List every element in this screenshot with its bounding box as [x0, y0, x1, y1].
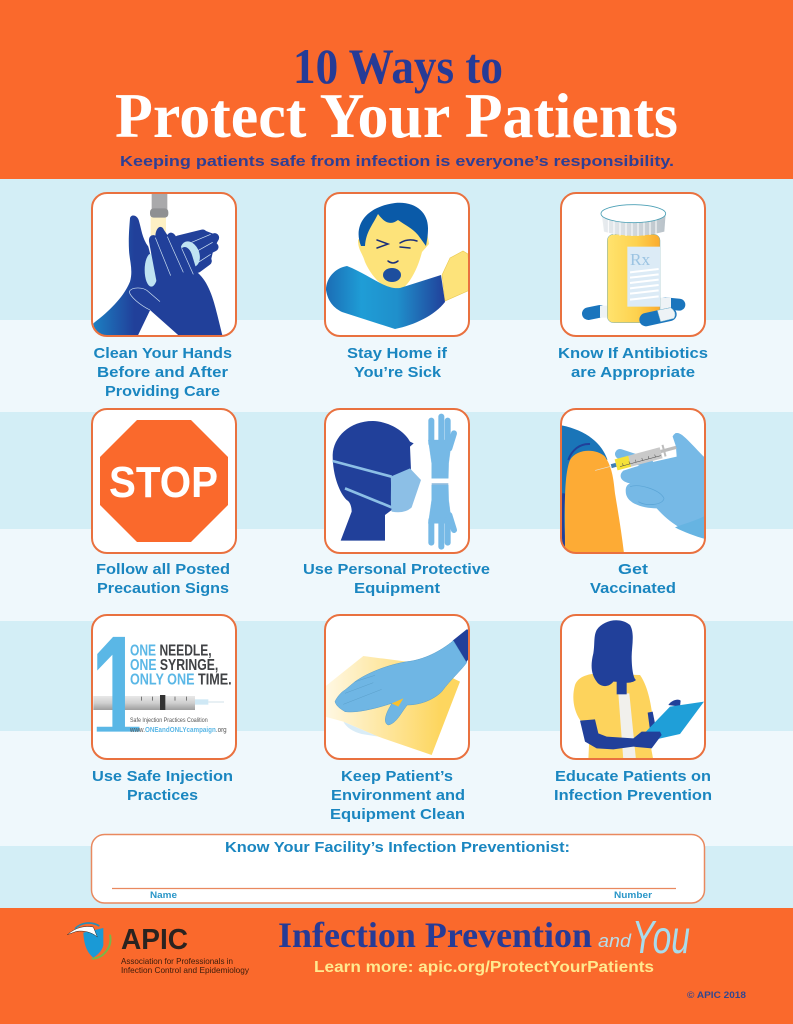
caption: clean hands — [94, 345, 232, 400]
card: vaccination — [560, 409, 707, 553]
caption: clean hands: Providing Care — [105, 383, 220, 400]
title line 1: 10 Ways to — [293, 38, 503, 94]
caption: safe injection — [92, 768, 233, 804]
card: clean hands — [92, 192, 236, 337]
panel: know your infection preventionist: Name — [150, 890, 177, 901]
icon: pill bottle: Rx — [630, 250, 651, 269]
icon: woman with clipboard — [573, 620, 704, 760]
caption: clean environment — [330, 768, 465, 823]
footer banner — [0, 908, 793, 1024]
tagline — [278, 911, 690, 963]
caption: clean environment: Keep Patient’s — [341, 768, 453, 785]
icon: person sneezing into elbow — [326, 203, 470, 329]
card: antibiotics — [561, 193, 705, 336]
copyright: © APIC 2018 — [687, 990, 746, 1001]
panel: know your infection preventionist: Know Your Facility’s Infection Preventionist: — [225, 839, 570, 856]
header banner — [0, 0, 793, 179]
caption: protective equipment: Equipment — [354, 580, 440, 597]
caption: vaccinated: Get — [618, 561, 648, 578]
APIC logo — [67, 923, 250, 975]
campaign logo with syringe: ONE SYRINGE, — [130, 657, 218, 674]
card: one needle campaign — [91, 614, 237, 760]
card: protective equipment — [325, 409, 469, 553]
icon: washing hands — [93, 192, 223, 337]
card: clean environment — [325, 615, 470, 759]
caption: antibiotics: Know If Antibiotics — [558, 345, 708, 362]
caption: clean hands: Before and After — [97, 364, 228, 381]
caption: safe injection: Practices — [127, 787, 198, 804]
caption: stop signs: Follow all Posted — [96, 561, 230, 578]
caption: stop signs: Precaution Signs — [97, 580, 229, 597]
icon: masked head and gloves — [333, 417, 454, 547]
card: stop sign — [92, 409, 236, 553]
card: stay home — [325, 193, 470, 336]
caption: protective equipment — [303, 561, 490, 597]
icon: gloved hand with syringe and arm — [560, 425, 707, 553]
caption: stay home — [347, 345, 448, 381]
link line: Learn more: apic.org/ProtectYourPatients — [314, 959, 654, 976]
caption: educate patients — [554, 768, 712, 804]
panel: know your infection preventionist: Number — [614, 890, 652, 901]
icon: stop sign — [100, 420, 228, 542]
caption: antibiotics: are Appropriate — [571, 364, 695, 381]
caption: antibiotics — [558, 345, 708, 381]
panel: know your infection preventionist — [92, 834, 704, 903]
campaign logo with syringe: ONLY ONE TIME. — [130, 672, 232, 689]
caption: vaccinated — [590, 561, 676, 597]
background stripes — [0, 179, 793, 908]
campaign logo with syringe: Safe Injection Practices Coalition — [130, 717, 208, 724]
caption: safe injection: Use Safe Injection — [92, 768, 233, 785]
caption: stay home: Stay Home if — [347, 345, 448, 362]
icon: pill bottle — [588, 205, 679, 323]
caption: protective equipment: Use Personal Protective — [303, 561, 490, 578]
numeral one: 1 — [91, 604, 142, 775]
caption: educate patients: Educate Patients on — [555, 768, 711, 785]
campaign logo with syringe: ONE NEEDLE, — [130, 643, 212, 660]
tagline: You — [632, 911, 690, 963]
APIC logo: APIC — [121, 924, 188, 956]
caption: clean environment: Equipment Clean — [330, 806, 465, 823]
icon: stop sign: STOP — [109, 458, 218, 507]
caption: stop signs — [96, 561, 230, 597]
caption: vaccinated: Vaccinated — [590, 580, 676, 597]
tagline: and — [598, 931, 632, 951]
card: educate patients — [561, 615, 705, 760]
caption: clean environment: Environment and — [331, 787, 465, 804]
icon: gloved hand wiping with cloth — [325, 629, 470, 755]
campaign logo with syringe: www.ONEandONLYcampaign.org — [129, 727, 227, 734]
caption: educate patients: Infection Prevention — [554, 787, 712, 804]
caption: clean hands: Clean Your Hands — [94, 345, 232, 362]
APIC logo: Infection Control and Epidemiology — [121, 965, 250, 975]
APIC logo: Association for Professionals in — [121, 956, 233, 966]
title line 2: Protect Your Patients — [115, 80, 678, 151]
tagline: Infection Prevention — [278, 915, 592, 955]
caption: stay home: You’re Sick — [354, 364, 442, 381]
campaign logo with syringe — [93, 636, 231, 734]
subtitle: Keeping patients safe from infection is everyone’s responsibility. — [120, 153, 674, 170]
